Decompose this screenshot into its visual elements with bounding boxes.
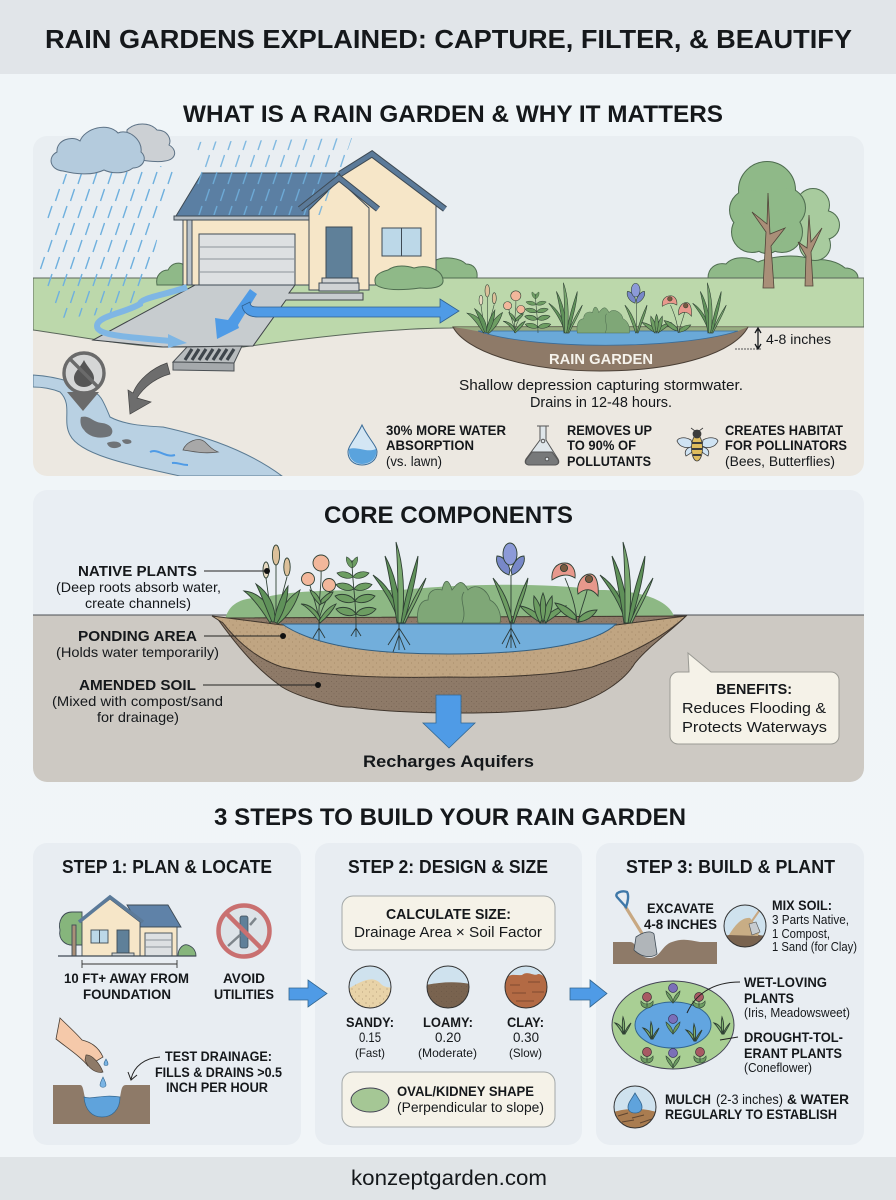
label: mulch: (2-3 inches) [716, 1091, 783, 1107]
label: clay: (Slow) [509, 1046, 542, 1060]
driveway [93, 285, 363, 347]
callout: benefits: Protects Waterways [682, 719, 827, 736]
label: sandy [346, 1014, 394, 1060]
stat: absorption: ABSORPTION [386, 438, 474, 453]
panel: step 2 [315, 843, 582, 1145]
label: excavate: EXCAVATE [647, 900, 714, 916]
depth marker [735, 328, 831, 349]
amended soil layer [217, 616, 686, 713]
callout: benefits [670, 653, 839, 744]
title band: RAIN GARDENS EXPLAINED: CAPTURE, FILTER, & BEAUTIFY [45, 24, 852, 54]
icon: mulch and water [614, 1086, 656, 1128]
title band [0, 0, 896, 74]
bushes by house [157, 258, 477, 285]
label: wet-loving plants [744, 974, 850, 1020]
label: test drainage [155, 1049, 282, 1095]
shape box: OVAL/KIDNEY SHAPE [397, 1083, 534, 1099]
label: clay: CLAY: [507, 1014, 544, 1030]
step 2 title: STEP 2: DESIGN & SIZE [348, 857, 548, 877]
garden plants [467, 283, 726, 334]
label: distance from foundation: 10 FT+ AWAY FROM [64, 970, 189, 986]
label: ponding area [56, 628, 286, 660]
stat: absorption: (vs. lawn) [386, 454, 442, 469]
icon: drainage test [53, 1018, 150, 1124]
stat: absorption [386, 423, 506, 469]
stat: absorption: 30% MORE WATER [386, 423, 506, 438]
icon: mix soil [724, 905, 766, 947]
tan ponding soil layer [212, 616, 686, 677]
lawn [33, 278, 864, 347]
house [174, 154, 436, 291]
label: sandy: (Fast) [355, 1046, 385, 1060]
label: drought-tolerant plants: DROUGHT-TOL- [744, 1029, 843, 1045]
arrow: step 1 to step 2 [289, 980, 327, 1007]
icon: loamy soil [426, 965, 470, 1009]
footer: konzeptgarden.com [351, 1167, 547, 1190]
stream from downspout [97, 287, 187, 341]
description [460, 379, 742, 407]
heading: what is a rain garden: WHAT IS A RAIN GARDEN & WHY IT MATTERS [183, 101, 723, 128]
leader lines [687, 982, 740, 1040]
label: drought-tolerant plants [744, 1029, 843, 1075]
label: mulch: & WATER [787, 1091, 849, 1107]
label: ponding area: (Holds water temporarily) [56, 644, 219, 660]
footer [0, 1157, 896, 1200]
stat: pollinators [725, 423, 847, 469]
shape box [342, 1072, 555, 1127]
label: ponding area: PONDING AREA [78, 628, 197, 645]
label: amended soil: (Mixed with compost/sand [52, 693, 223, 709]
polluted stream [33, 375, 282, 476]
label: mulch: MULCH [665, 1091, 711, 1107]
label: mix soil: MIX SOIL: [772, 897, 832, 913]
stat: pollutants: POLLUTANTS [567, 454, 651, 469]
label: mix soil: 3 Parts Native, [772, 912, 849, 927]
green mound [225, 585, 675, 620]
no pollution pin [64, 353, 104, 411]
heading: three steps: 3 STEPS TO BUILD YOUR RAIN GARDEN [214, 804, 686, 831]
label: mix soil: 1 Sand (for Clay) [772, 939, 857, 954]
icon: water drop [348, 425, 377, 465]
rocks [183, 440, 218, 453]
label: native plants: NATIVE PLANTS [78, 563, 197, 580]
label: test drainage: FILLS & DRAINS >0.5 [155, 1065, 282, 1080]
depth marker: 4-8 inches [766, 331, 831, 347]
gray arrow [128, 363, 170, 414]
label: drought-tolerant plants: ERANT PLANTS [744, 1045, 842, 1061]
water [282, 624, 616, 654]
label: distance from foundation: FOUNDATION [83, 986, 171, 1002]
label: clay [507, 1014, 544, 1060]
label: drought-tolerant plants: (Coneflower) [744, 1060, 812, 1075]
label: sandy: SANDY: [346, 1014, 394, 1030]
arrow: step 2 to step 3 [570, 980, 607, 1007]
rain garden label: RAIN GARDEN [549, 351, 653, 368]
description: Drains in 12-48 hours. [530, 394, 672, 411]
label: recharges aquifers: Recharges Aquifers [363, 752, 534, 771]
label: amended soil [52, 677, 321, 725]
tree trunks [752, 193, 822, 288]
label: loamy: (Moderate) [418, 1046, 477, 1060]
storm drain [173, 346, 242, 371]
label: wet-loving plants: PLANTS [744, 990, 794, 1006]
arrow to rain garden [242, 299, 459, 323]
label: loamy [418, 1014, 477, 1060]
shape box: (Perpendicular to slope) [397, 1099, 544, 1115]
heading: core components: CORE COMPONENTS [324, 502, 573, 529]
panel: step 3 [596, 843, 864, 1145]
arrow: recharge [423, 695, 475, 748]
arrow to drain [215, 289, 257, 339]
oil slick [80, 417, 131, 448]
native plants illustration [244, 542, 653, 624]
stat: pollinators: FOR POLLINATORS [725, 438, 847, 453]
label: avoid utilities: UTILITIES [214, 986, 274, 1002]
step 3 title: STEP 3: BUILD & PLANT [626, 857, 835, 877]
icon: shovel excavating [613, 891, 717, 964]
label: amended soil: AMENDED SOIL [79, 677, 196, 694]
label: excavate: 4-8 INCHES [644, 916, 717, 932]
label: native plants: create channels) [85, 595, 191, 611]
stat: pollinators: CREATES HABITAT [725, 423, 844, 438]
label: excavate [644, 900, 717, 932]
icon: clay soil [504, 965, 548, 1009]
icon: avoid utilities [218, 906, 270, 956]
label: native plants [56, 563, 270, 611]
label: test drainage: TEST DRAINAGE: [165, 1049, 272, 1064]
label: distance from foundation [64, 970, 189, 1002]
label: loamy: 0.20 [435, 1029, 461, 1045]
callout: benefits: Reduces Flooding & [682, 700, 826, 717]
panel: step 1 [33, 843, 301, 1145]
stat: pollutants: REMOVES UP [567, 423, 652, 438]
arrow: test drainage pointer [128, 1057, 160, 1080]
front bush [375, 266, 443, 290]
rain garden basin [453, 327, 748, 371]
stat: pollinators: (Bees, Butterflies) [725, 454, 835, 469]
label: mix soil [772, 897, 857, 954]
label: avoid utilities [214, 970, 274, 1002]
label: test drainage: INCH PER HOUR [166, 1080, 268, 1095]
label: wet-loving plants: WET-LOVING [744, 974, 827, 990]
formula box [342, 896, 555, 950]
callout: benefits: BENEFITS: [716, 681, 792, 698]
icon: bee [677, 428, 718, 461]
step 1 title: STEP 1: PLAN & LOCATE [62, 857, 272, 877]
label: mix soil: 1 Compost, [772, 926, 830, 941]
label: sandy: 0.15 [359, 1029, 381, 1045]
planting plan diagram [612, 981, 734, 1069]
icon: house with setback [58, 897, 196, 968]
icon: sandy soil [348, 965, 392, 1009]
label: clay: 0.30 [513, 1029, 539, 1045]
label: loamy: LOAMY: [423, 1014, 473, 1030]
panel: core components [33, 490, 864, 782]
stat: pollutants [567, 426, 652, 466]
label: mulch: REGULARLY TO ESTABLISH [665, 1106, 837, 1122]
label: amended soil: for drainage) [97, 709, 179, 725]
roots [313, 623, 520, 652]
description: Shallow depression capturing stormwater. [459, 377, 743, 394]
label: wet-loving plants: (Iris, Meadowsweet) [744, 1005, 850, 1020]
icon: flask [525, 426, 559, 465]
background tree crowns and bushes [708, 162, 858, 278]
label: mulch [665, 1091, 849, 1122]
stat: pollutants: TO 90% OF [567, 438, 636, 453]
rain [38, 165, 175, 318]
label: native plants: (Deep roots absorb water, [56, 579, 221, 595]
formula box: CALCULATE SIZE: [386, 906, 511, 923]
label: avoid utilities: AVOID [223, 970, 265, 986]
formula box: Drainage Area × Soil Factor [354, 924, 542, 941]
storm cloud [51, 124, 175, 174]
panel: what is a rain garden [33, 124, 864, 476]
roof gables [300, 154, 445, 209]
